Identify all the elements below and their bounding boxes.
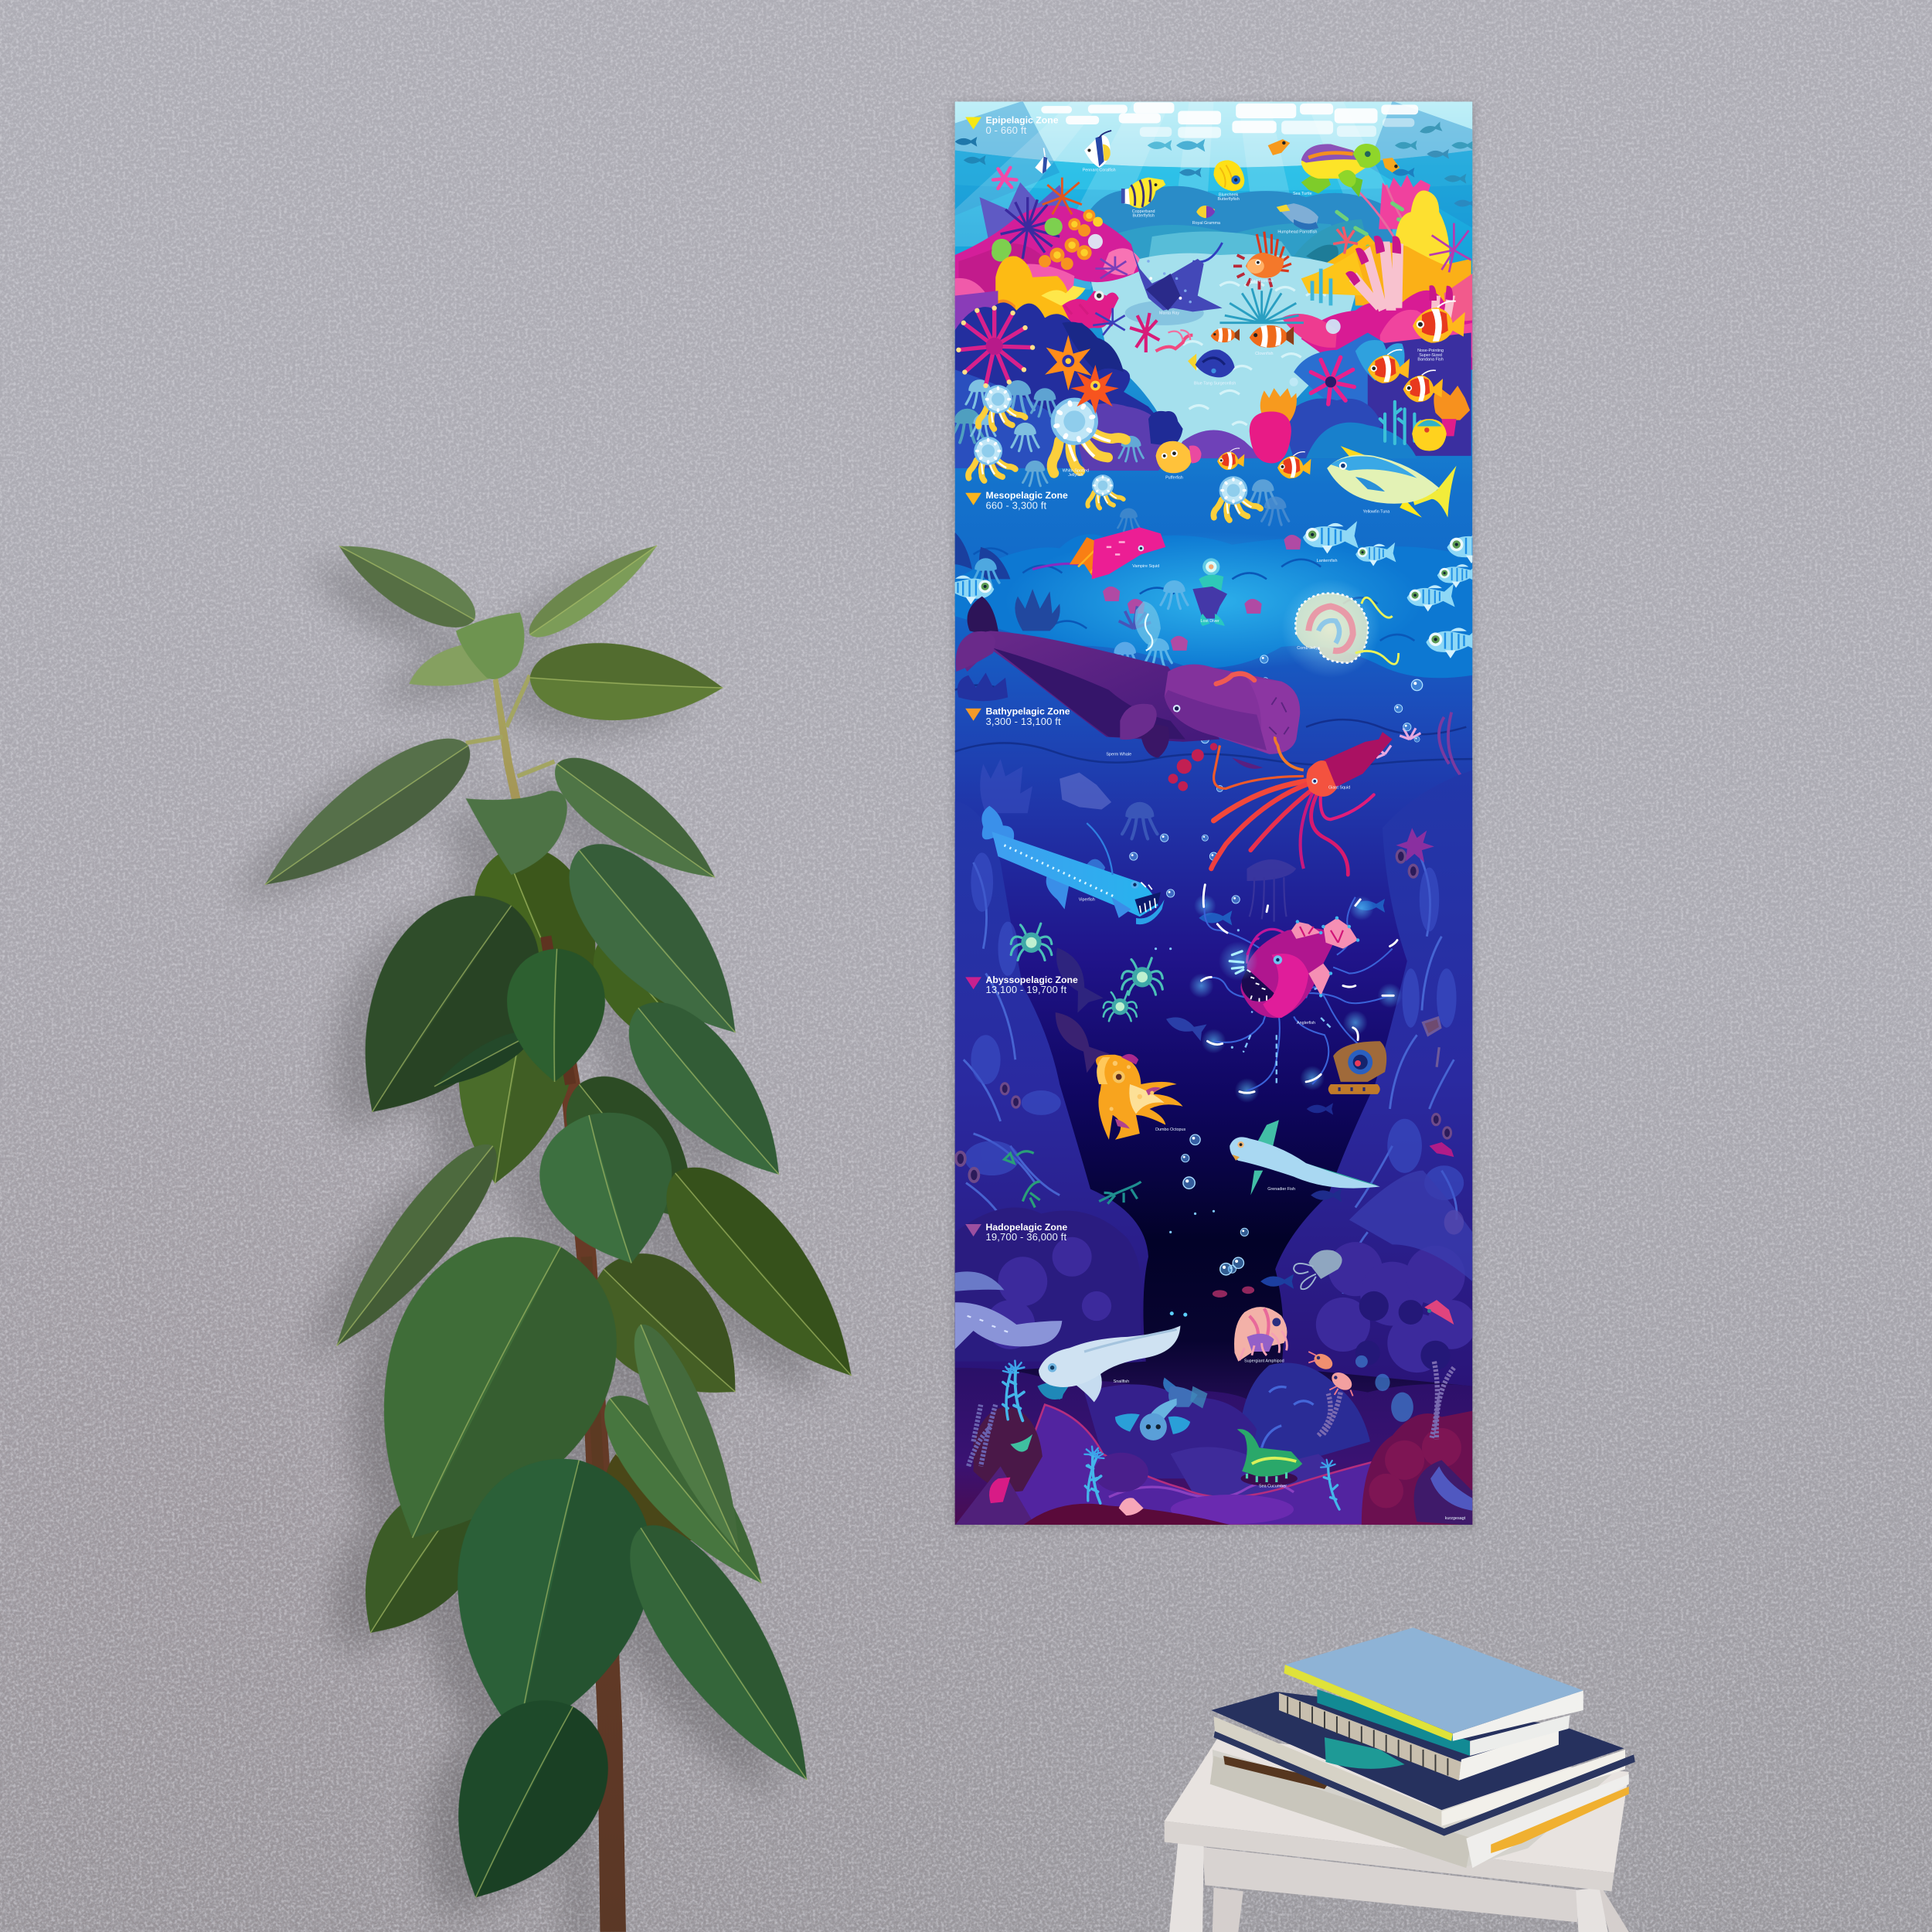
wall contour	[964, 850, 1457, 1294]
species labels: Snailfish	[1114, 1379, 1129, 1384]
lanternfish school	[941, 521, 1502, 658]
big reef anemone	[1219, 288, 1304, 323]
fans	[1291, 922, 1321, 939]
copperband butterflyfish	[1121, 178, 1165, 208]
grey jellyfish	[1294, 1250, 1342, 1289]
orange tube anemone	[1434, 386, 1470, 420]
dumbo octopus	[1096, 1054, 1183, 1140]
species labels: White-Spotted	[1063, 469, 1089, 474]
honeycomb coral	[1039, 209, 1095, 270]
species labels: Royal Gramma	[1192, 221, 1220, 226]
viperfish	[981, 806, 1165, 924]
species labels: Sperm Whale	[1106, 752, 1131, 757]
teal corals	[1380, 402, 1420, 444]
magenta mound	[955, 206, 1140, 302]
species labels: Red Lionfish	[1250, 279, 1274, 284]
species labels: Vampire Squid	[1132, 564, 1159, 569]
small orange reef fish	[1268, 139, 1400, 172]
lost diver	[1192, 558, 1227, 626]
zone marker: hadopelagic: 19,700 - 36,000 ft	[986, 1231, 1066, 1243]
deep crabs	[1011, 923, 1162, 1021]
navy book cover	[1211, 1692, 1624, 1810]
seafloor	[955, 1355, 1472, 1526]
lower-wall lumps	[955, 1207, 1142, 1362]
blue stem anemones	[998, 1364, 1019, 1420]
species labels: Butterflyfish	[1217, 197, 1240, 202]
species labels: Clownfish	[1255, 352, 1274, 356]
top blue book	[1453, 1691, 1583, 1741]
species labels: Sea Cucumber	[1259, 1484, 1287, 1488]
jaw fin	[1120, 704, 1157, 740]
sea turtle	[1301, 144, 1380, 197]
zone marker: epipelagic	[965, 114, 1059, 136]
trunk mid overlay	[546, 937, 570, 1084]
striped reef fish	[1217, 301, 1465, 478]
small floor creatures	[989, 1434, 1144, 1515]
small bannerfish	[1035, 148, 1051, 174]
species labels: Viperfish	[1079, 897, 1095, 902]
anglerfish	[1219, 917, 1359, 1018]
squid sucker mark	[1216, 674, 1254, 684]
snailfish	[1037, 1326, 1180, 1402]
ocean depth gradient	[955, 101, 1472, 1526]
sea cucumber	[1237, 1429, 1302, 1486]
species labels	[1063, 168, 1466, 1521]
species labels: Nose-Pointing	[1417, 349, 1444, 353]
mantle	[1321, 732, 1393, 788]
species labels: Blue Tang Surgeonfish	[1194, 381, 1236, 386]
navy book pages	[1213, 1716, 1441, 1826]
grenadier fish	[1230, 1120, 1380, 1196]
trunk lower overlay	[587, 1257, 601, 1528]
navy rocks	[955, 302, 1171, 468]
species labels: kurzgesagt	[1445, 1516, 1466, 1521]
tube anemones	[1349, 241, 1455, 330]
magenta mound	[1301, 291, 1472, 369]
species labels: Bluecheek	[1219, 193, 1239, 198]
rubber plant	[246, 524, 887, 1932]
bottom white book	[1213, 1750, 1611, 1866]
distant reef hills	[1090, 186, 1399, 290]
sperm whale	[956, 597, 1300, 769]
small reef details	[993, 168, 1354, 463]
back corals	[980, 182, 1097, 259]
species labels: Dumbo Octopus	[1155, 1128, 1185, 1132]
front legs	[1169, 1842, 1608, 1932]
pink top coral	[1379, 175, 1430, 230]
zone marker: hadopelagic	[965, 1222, 1067, 1243]
zone marker: bathypelagic: Bathypelagic Zone	[986, 706, 1070, 717]
lionfish	[1233, 232, 1291, 290]
orange shrimps	[1308, 1300, 1454, 1396]
yellowfin tuna	[1327, 446, 1457, 518]
bubbles	[1130, 655, 1423, 1317]
cave walls	[954, 770, 1476, 1386]
purple shelf	[955, 291, 998, 330]
yellow pufferfish	[1412, 419, 1447, 451]
species labels: Lanternfish	[1317, 559, 1338, 563]
species labels: Grenadier Fish	[1267, 1187, 1295, 1192]
species labels: Bandana Fish	[1417, 357, 1444, 362]
zone marker: mesopelagic: Mesopelagic Zone	[986, 490, 1068, 501]
species labels: Super-Sized	[1419, 353, 1442, 358]
spiral notebook	[1279, 1693, 1461, 1781]
species labels: Copperband	[1132, 209, 1155, 214]
species labels: Pennant Coralfish	[1083, 168, 1116, 173]
tube worms	[1396, 849, 1419, 879]
left anemone	[956, 305, 1035, 388]
stool top	[1165, 1739, 1629, 1872]
species labels: Supergiant Amphipod	[1244, 1359, 1284, 1364]
species labels: Comb Jelly	[1297, 646, 1318, 651]
pennant coralfish	[1084, 131, 1111, 168]
supergiant amphipod	[1234, 1307, 1287, 1362]
blue corals	[1294, 332, 1411, 425]
rubber plant shadow	[213, 541, 855, 1932]
zone marker: abyssopelagic: Abyssopelagic Zone	[986, 975, 1078, 985]
sandy seabed	[1090, 253, 1362, 454]
feather worms	[1318, 1362, 1454, 1439]
bioluminescent angler lines	[1189, 885, 1402, 1103]
eye	[1173, 705, 1180, 713]
shrimp	[1156, 330, 1192, 351]
left wall	[955, 801, 1148, 1374]
poster shadow	[952, 101, 1475, 1529]
small crustaceans	[1004, 1142, 1464, 1235]
zone marker: mesopelagic: 660 - 3,300 ft	[986, 499, 1047, 511]
trunk	[493, 678, 626, 1932]
right coral reef	[1281, 175, 1472, 458]
species labels: Manta Ray	[1159, 311, 1179, 316]
silhouette fish	[955, 121, 1476, 1289]
white-spotted jellyfish	[968, 385, 1260, 520]
zone marker: bathypelagic: 3,300 - 13,100 ft	[986, 716, 1061, 727]
species labels: Humphead Parrotfish	[1277, 230, 1317, 234]
stool apron	[1202, 1847, 1580, 1922]
species labels: Lost Diver	[1201, 619, 1219, 624]
lure	[1219, 941, 1258, 981]
blood cloud	[1168, 743, 1217, 791]
species labels: Jellyfish	[1068, 473, 1083, 478]
bluecheek butterflyfish	[1213, 160, 1244, 191]
blue tang	[1188, 349, 1235, 377]
species labels: Butterflyfish	[1132, 214, 1155, 219]
zone marker: epipelagic: 0 - 660 ft	[986, 124, 1027, 136]
other mid jellies	[1134, 601, 1161, 651]
mesopelagic light band	[955, 532, 1472, 678]
species labels: Sea Turtle	[1293, 192, 1312, 196]
head	[1306, 760, 1337, 797]
blue rock	[1240, 1362, 1370, 1460]
royal gramma	[1196, 206, 1215, 218]
fluke	[956, 631, 995, 672]
petioles	[466, 675, 554, 776]
zone marker: mesopelagic	[965, 490, 1068, 511]
red rocks right	[1362, 1411, 1472, 1526]
orange book	[1491, 1787, 1629, 1853]
maroon left	[974, 1407, 1043, 1492]
zone marker: abyssopelagic: 13,100 - 19,700 ft	[986, 984, 1066, 995]
pink-rimmed ridge	[998, 1405, 1380, 1526]
head	[1165, 665, 1300, 754]
zone marker: epipelagic: Epipelagic Zone	[986, 114, 1059, 125]
pink ledge	[1281, 314, 1337, 348]
pufferfish	[1156, 441, 1202, 473]
poster: ocean zones	[941, 101, 1502, 1526]
green coral	[992, 218, 1063, 261]
species labels: Giant Squid	[1328, 785, 1350, 790]
clownfish pair	[1211, 325, 1294, 348]
upper fluke	[968, 597, 999, 638]
left coral reef	[955, 182, 1263, 471]
zone marker: hadopelagic: Hadopelagic Zone	[986, 1222, 1067, 1233]
red crab and coral	[1062, 291, 1119, 330]
species labels: Yellowfin Tuna	[1363, 509, 1389, 514]
species labels: Pufferfish	[1165, 475, 1183, 480]
purple starfish	[1396, 828, 1434, 862]
ghost jellies	[951, 379, 1289, 838]
ghost jelly and lure lines	[1247, 859, 1296, 922]
back leaves	[454, 828, 630, 1045]
urchin	[1001, 197, 1060, 259]
body	[961, 631, 1219, 742]
vampire squid	[1032, 527, 1165, 579]
left eels	[955, 1271, 1062, 1349]
teal book	[1317, 1689, 1470, 1756]
yellow corals	[995, 256, 1084, 330]
blue deep fish	[1115, 1378, 1207, 1440]
zone marker: abyssopelagic	[965, 975, 1078, 995]
manta ray	[1131, 243, 1223, 311]
species labels: Anglerfish	[1297, 1021, 1315, 1026]
deep-water plants and contour lines	[955, 673, 1472, 813]
giant squid	[1168, 732, 1393, 875]
stool with books	[1165, 1628, 1635, 1932]
kelp strands	[1349, 182, 1454, 296]
submarine	[1328, 1041, 1386, 1094]
purple fans	[1095, 257, 1128, 278]
top leaves	[327, 524, 486, 642]
sunlit surface with rays and clouds	[955, 101, 1472, 296]
stool legs	[1213, 1888, 1629, 1932]
right wall	[1275, 770, 1472, 1386]
spiky plants	[1429, 223, 1471, 272]
orange starfish	[1045, 335, 1119, 414]
orange coral	[1353, 243, 1471, 305]
purple mounds	[1084, 1384, 1257, 1478]
lower body shade	[993, 648, 1185, 740]
tentacles	[1214, 746, 1304, 788]
lower fin	[1140, 724, 1169, 758]
yellow coral	[1394, 191, 1450, 265]
zone marker: bathypelagic	[965, 706, 1070, 727]
humphead parrotfish	[1277, 203, 1318, 230]
comb jelly	[1281, 579, 1399, 678]
